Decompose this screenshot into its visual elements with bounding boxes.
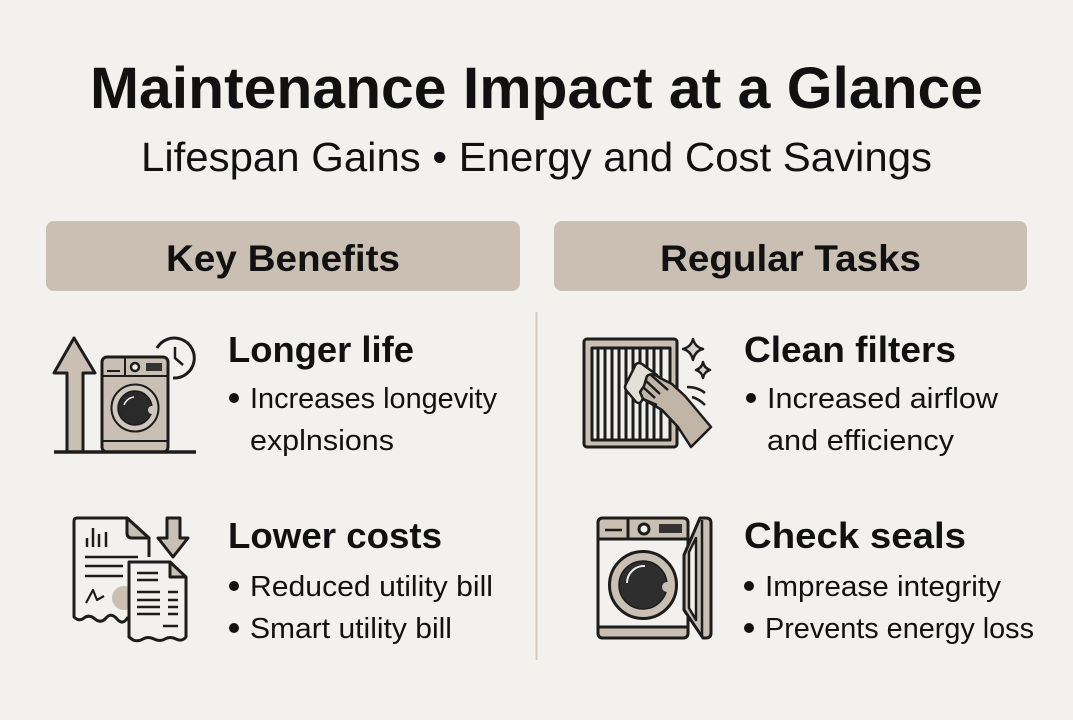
text block: lower costs details: Reduced utility bill [250,571,493,603]
text block: check seals details [744,571,1034,645]
text block: check seals details: Imprease integrity [765,571,1001,603]
text block: longer life details [229,383,497,457]
icon: hand cleaning filter with sparkles [584,339,711,447]
icon: utility bills with down arrow [74,518,188,641]
panel header: regular tasks: Regular Tasks [660,238,921,279]
title: Maintenance Impact at a Glance [90,56,983,121]
text block: longer life details: Increases longevity [250,383,497,415]
panel header: key benefits [46,221,520,291]
panel header: key benefits: Key Benefits [166,238,400,279]
heading: longer life: Longer life [228,329,414,370]
text block: check seals details: Prevents energy loss [765,613,1034,645]
text block: lower costs details: Smart utility bill [250,613,452,645]
icon: washer with open door seal [598,518,711,638]
text block: clean filters details [746,383,999,457]
heading: lower costs: Lower costs [228,515,442,556]
heading: check seals: Check seals [744,515,966,556]
heading: clean filters: Clean filters [744,329,956,370]
text block: lower costs details [229,571,493,645]
text block: longer life details: explnsions [250,425,394,457]
text block: clean filters details: and efficiency [767,425,955,457]
panel header: regular tasks [554,221,1027,291]
icon: washer with up arrow and clock [54,338,196,452]
subtitle: Lifespan Gains • Energy and Cost Savings [141,134,932,180]
text block: clean filters details: Increased airflow [767,383,999,415]
